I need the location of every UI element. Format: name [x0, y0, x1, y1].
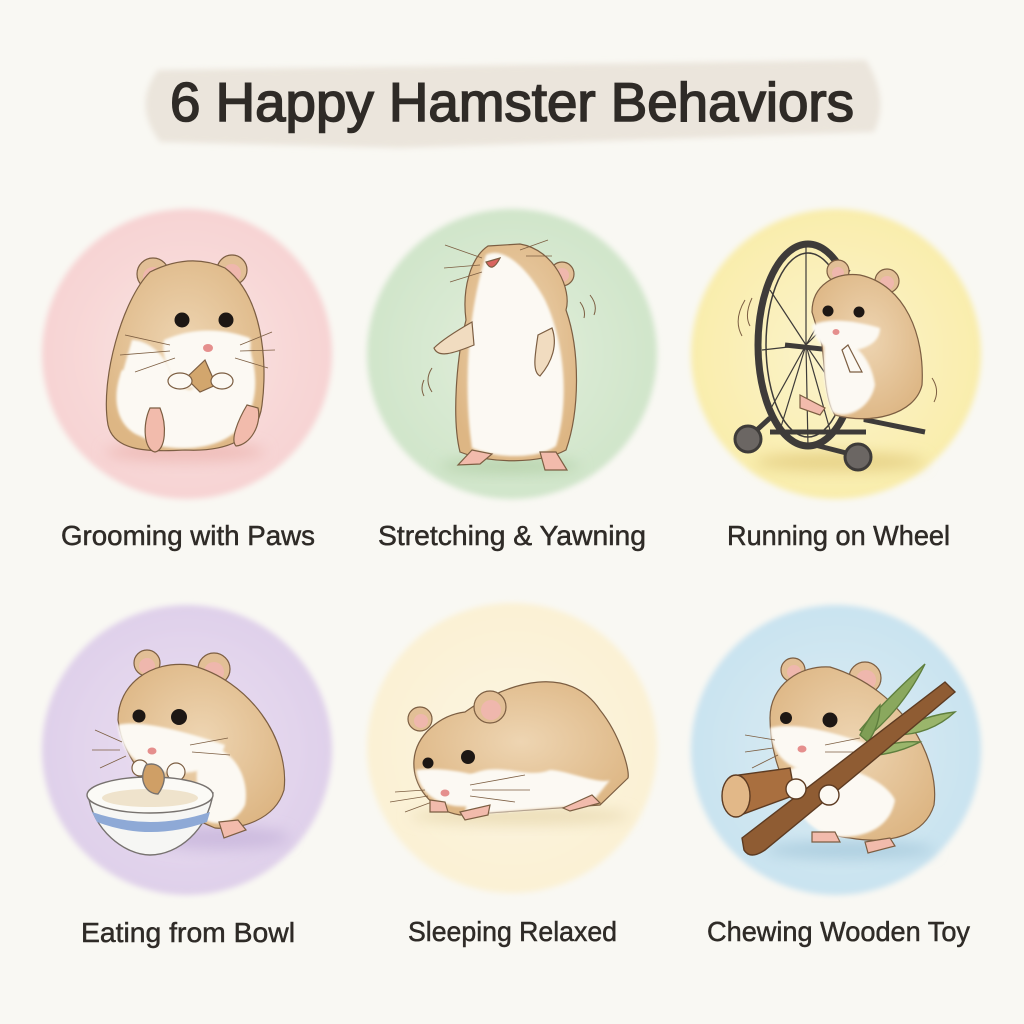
icon: wooden toy and leaves [722, 664, 955, 855]
panel: stretching and yawning [367, 209, 657, 499]
label: sleeping relaxed: Sleeping Relaxed [408, 916, 617, 947]
icon: running hamster [738, 260, 937, 419]
label: chewing wooden toy: Chewing Wooden Toy [707, 916, 970, 947]
icon: sleeping hamster [390, 682, 628, 820]
label: grooming with paws: Grooming with Paws [61, 520, 315, 551]
icon: eating hamster [92, 650, 285, 838]
panel: grooming with paws [42, 209, 332, 499]
icon: chewing hamster [745, 658, 935, 853]
icon: exercise wheel [735, 243, 925, 470]
panel: sleeping relaxed [367, 603, 657, 893]
title [145, 60, 880, 148]
title: 6 Happy Hamster Behaviors [170, 71, 854, 133]
panel: chewing wooden toy [691, 605, 981, 895]
label: eating from bowl: Eating from Bowl [81, 917, 295, 948]
panel: running on wheel [691, 209, 981, 499]
icon: grooming hamster [106, 255, 275, 452]
icon: stretching hamster [422, 240, 595, 470]
label: running on wheel: Running on Wheel [727, 520, 950, 551]
panel: eating from bowl [42, 605, 332, 895]
label: stretching and yawning: Stretching & Yawning [378, 520, 646, 551]
icon: bowl [87, 764, 213, 855]
